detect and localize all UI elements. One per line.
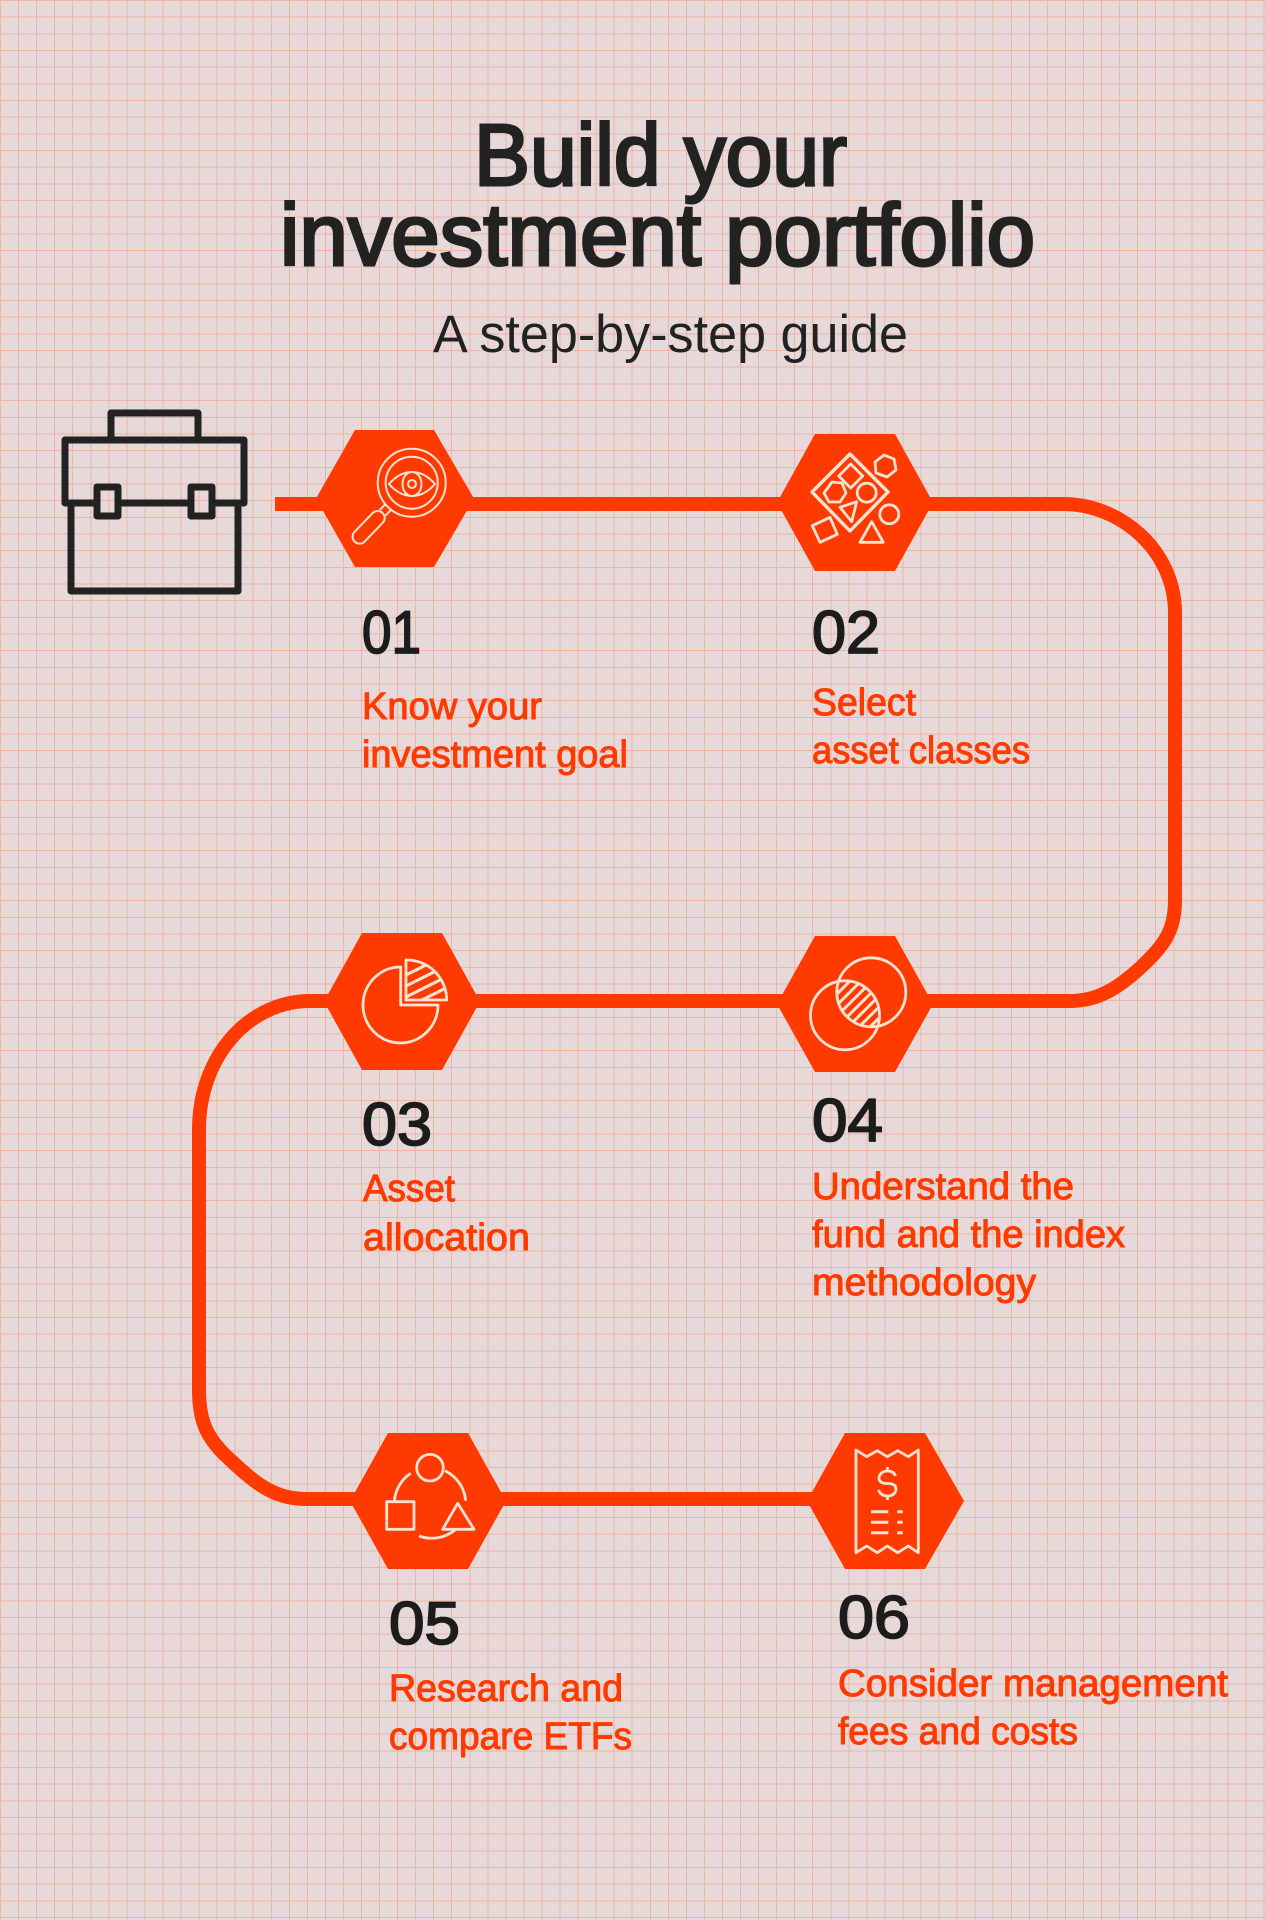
number 05: 05: [389, 1590, 460, 1657]
icon: receipt: [856, 1450, 918, 1553]
label 05: Research and: [389, 1668, 623, 1710]
step 01: [316, 430, 628, 776]
label 01: investment goal: [362, 734, 628, 776]
number 01: 01: [362, 599, 421, 666]
hexagon 04: [777, 936, 933, 1072]
label 01: [362, 686, 628, 776]
connector path: [199, 504, 1175, 1499]
label 02: asset classes: [812, 730, 1030, 772]
label 06: Consider management: [838, 1663, 1228, 1705]
label 01: Know your: [362, 686, 542, 728]
step 04: [777, 936, 1125, 1304]
step 02: [777, 434, 1030, 772]
icon: asset shapes: [812, 454, 899, 542]
label 02: [812, 682, 1030, 772]
number 03: 03: [362, 1091, 432, 1158]
step 03: [324, 933, 530, 1259]
label 05: [389, 1668, 632, 1758]
title: [280, 107, 1035, 284]
label 02: Select: [812, 682, 916, 724]
icon: briefcase: [65, 413, 244, 591]
label 03: [363, 1168, 530, 1259]
label 04: [812, 1166, 1125, 1304]
label 04: Understand the: [812, 1166, 1074, 1208]
number 02: 02: [812, 599, 880, 666]
title: investment portfolio: [280, 187, 1035, 284]
title: Build your: [474, 107, 847, 204]
hexagon 01: [316, 430, 474, 567]
label 03: Asset: [363, 1168, 455, 1210]
icon: cycle of shapes: [387, 1454, 474, 1538]
label 04: methodology: [812, 1262, 1036, 1304]
label 06: fees and costs: [838, 1711, 1078, 1753]
number 06: 06: [838, 1584, 910, 1651]
label 04: fund and the index: [812, 1214, 1125, 1256]
step 05: [350, 1433, 632, 1758]
hexagon 03: [324, 933, 480, 1070]
label 06: [838, 1663, 1228, 1753]
label 05: compare ETFs: [389, 1716, 632, 1758]
number 04: 04: [812, 1087, 883, 1154]
step 06: [807, 1433, 1228, 1753]
hexagon 06: [807, 1433, 964, 1569]
icon: pie chart: [363, 955, 452, 1043]
icon: overlapping circles: [810, 958, 906, 1050]
hexagon 05: [350, 1433, 506, 1569]
icon: magnifier with eye: [350, 449, 446, 547]
subtitle: A step-by-step guide: [433, 305, 908, 364]
hexagon 02: [777, 434, 933, 571]
label 03: allocation: [363, 1217, 530, 1259]
